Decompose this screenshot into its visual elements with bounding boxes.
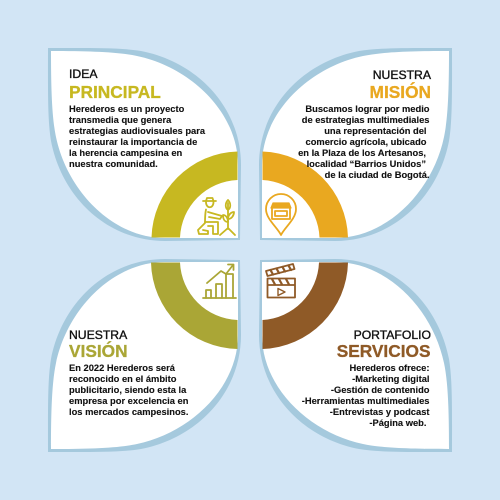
text block: nuestra vision: publicitario, siendo esta la [69, 385, 187, 395]
text block: portafolio servicios: -Entrevistas y podcast [330, 407, 430, 417]
text block: idea principal: Herederos es un proyecto [69, 104, 185, 114]
ring segment: nuestra vision [151, 262, 238, 349]
ring segment: portafolio servicios [262, 262, 348, 349]
icon: film clapperboard [266, 264, 295, 298]
text block: nuestra vision: los mercados campesinos. [69, 407, 188, 417]
text block: nuestra mision: Buscamos lograr por medio [305, 104, 430, 114]
heading: nuestra: NUESTRA [69, 328, 128, 342]
text block: portafolio servicios: Herederos ofrece: [350, 363, 430, 373]
panel: nuestra vision [48, 259, 241, 452]
heading: vision: VISIÓN [69, 341, 128, 361]
panel: portafolio servicios [259, 259, 452, 452]
text block: portafolio servicios: -Página web. [369, 418, 426, 428]
text block: idea principal: estrategias audiovisuales para [69, 126, 206, 136]
icon: growth chart [203, 264, 236, 298]
icon: farmer with plant [198, 198, 235, 235]
text block: nuestra mision: de la ciudad de Bogotá. [325, 170, 430, 180]
text block: nuestra vision: reconocido en el ámbito [69, 374, 177, 384]
text block: idea principal: reinstaurar la importancia de [69, 137, 197, 147]
text block: nuestra mision: de estrategias multimediales [302, 115, 430, 125]
text block: nuestra mision: en la Plaza de los Artesanos, [298, 148, 426, 158]
heading: principal: PRINCIPAL [69, 82, 161, 102]
ring segment: nuestra mision [262, 152, 348, 238]
ring segment: idea principal [152, 152, 238, 238]
text block: nuestra mision: localidad “Barrios Unidos” [307, 159, 426, 169]
text block: portafolio servicios: -Marketing digital [352, 374, 430, 384]
icon: location pin with store [266, 194, 296, 235]
text block: idea principal: la herencia campesina en [69, 148, 183, 158]
text block: portafolio servicios: -Gestión de contenido [331, 385, 430, 395]
panel: nuestra mision [259, 48, 452, 241]
text block: nuestra mision: comercio agrícola, ubicado [306, 137, 427, 147]
panel: idea principal [48, 48, 241, 241]
text block: idea principal: nuestra comunidad. [69, 159, 158, 169]
text block: nuestra vision: En 2022 Herederos será [69, 363, 176, 373]
heading: mision: MISIÓN [370, 82, 431, 102]
heading: portafolio: PORTAFOLIO [354, 328, 431, 342]
heading: idea: IDEA [69, 67, 98, 81]
heading: nuestra: NUESTRA [373, 68, 432, 82]
text block: idea principal: transmedia que genera [69, 115, 172, 125]
text block: nuestra vision: empresa por excelencia en [69, 396, 189, 406]
heading: servicios: SERVICIOS [337, 341, 430, 361]
text block: portafolio servicios: -Herramientas multimediales [302, 396, 430, 406]
text block: nuestra mision: una representación del [324, 126, 426, 136]
